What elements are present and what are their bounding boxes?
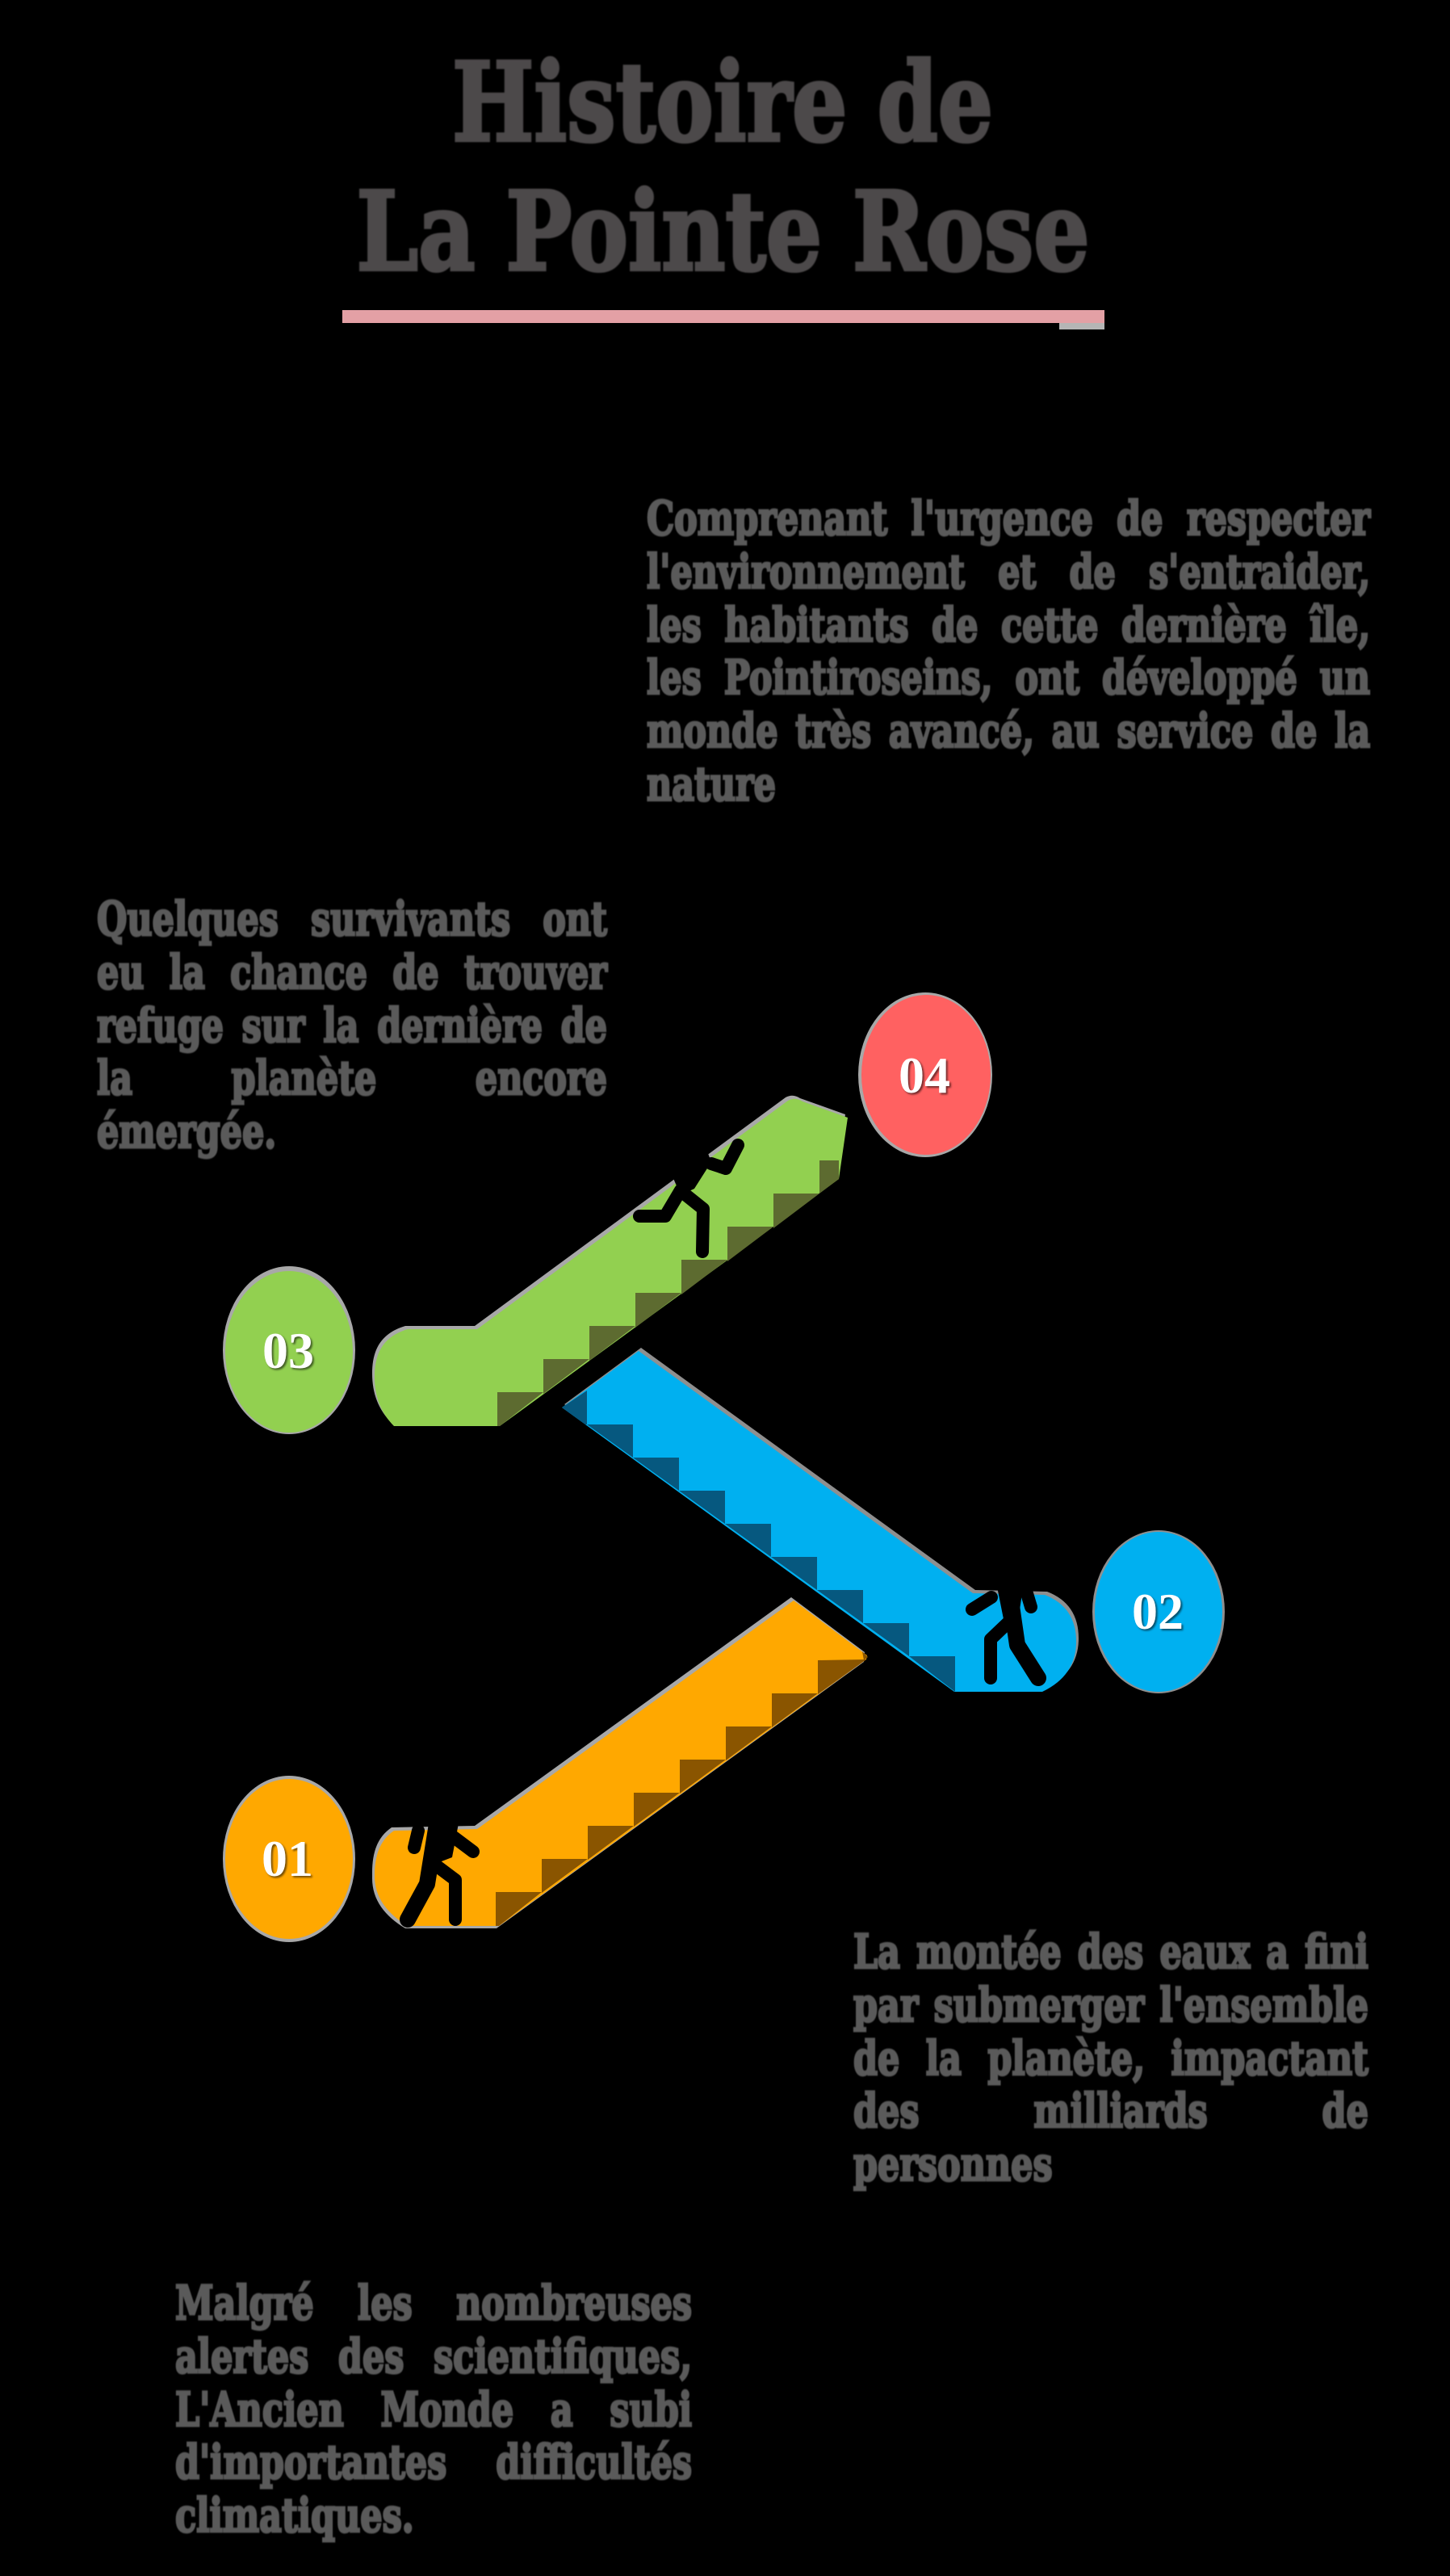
panel: stair step 03 green <box>223 1096 848 1434</box>
panel: stair step 02 blue <box>562 1348 1225 1693</box>
text block: survivors: la planète encore <box>97 1051 607 1105</box>
text block: old world <box>175 2276 693 2544</box>
badge 04 <box>858 992 992 1157</box>
badge 01: 01 <box>262 1830 313 1887</box>
text block: old world: Malgré les nombreuses <box>175 2276 692 2331</box>
title underline <box>342 310 1104 329</box>
text block: top right: les Pointiroseins, ont développé un <box>647 650 1370 705</box>
text block: rising waters: personnes <box>853 2137 1053 2192</box>
icon: walking figure on blue stairs <box>972 1583 1038 1678</box>
text block: rising waters: de la planète, impactant <box>853 2031 1368 2086</box>
orange staircase <box>372 1597 868 1928</box>
icon: walking figure on orange stairs <box>408 1823 473 1919</box>
text block: survivors <box>97 892 609 1160</box>
text block: top right: l'environnement et de s'entraider, <box>647 544 1370 599</box>
text block: top right <box>646 491 1372 812</box>
badge 02 <box>1092 1530 1225 1693</box>
text block: survivors: émergée. <box>97 1104 276 1159</box>
blue staircase <box>562 1348 1079 1692</box>
text block: old world: climatiques. <box>175 2488 414 2543</box>
icon: climbing figure on green stairs <box>639 1139 738 1252</box>
text block: survivors: refuge sur la dernière de <box>97 998 607 1053</box>
text block: rising waters: des milliards de <box>853 2083 1368 2138</box>
badge 03 <box>223 1266 355 1434</box>
text block: top right: les habitants de cette dernière île, <box>647 598 1370 652</box>
green staircase <box>372 1096 848 1426</box>
text block: old world: L'Ancien Monde a subi <box>175 2382 692 2437</box>
text block: top right: Comprenant l'urgence de respecter <box>647 491 1370 546</box>
title: Histoire de <box>452 38 993 166</box>
text block: rising waters: La montée des eaux a fini <box>853 1924 1368 1979</box>
text block: old world: alertes des scientifiques, <box>175 2329 692 2384</box>
text block: top right: monde très avancé, au service de la <box>647 703 1370 758</box>
badge 03: 03 <box>262 1322 314 1379</box>
text block: rising waters: par submerger l'ensemble <box>853 1978 1368 2033</box>
panel: stair step 04 red badge <box>858 992 992 1157</box>
text block: old world: d'importantes difficultés <box>175 2435 692 2490</box>
text block: rising waters <box>853 1924 1369 2192</box>
text block: top right: nature <box>647 757 776 812</box>
badge 02: 02 <box>1132 1583 1184 1640</box>
badge 04: 04 <box>899 1047 950 1104</box>
text block: survivors: eu la chance de trouver <box>97 945 607 1000</box>
text block: survivors: Quelques survivants ont <box>97 892 607 946</box>
badge 01 <box>223 1776 355 1942</box>
panel: stair step 01 orange <box>223 1597 868 1942</box>
title: La Pointe Rose <box>357 167 1090 296</box>
title <box>357 38 1090 296</box>
